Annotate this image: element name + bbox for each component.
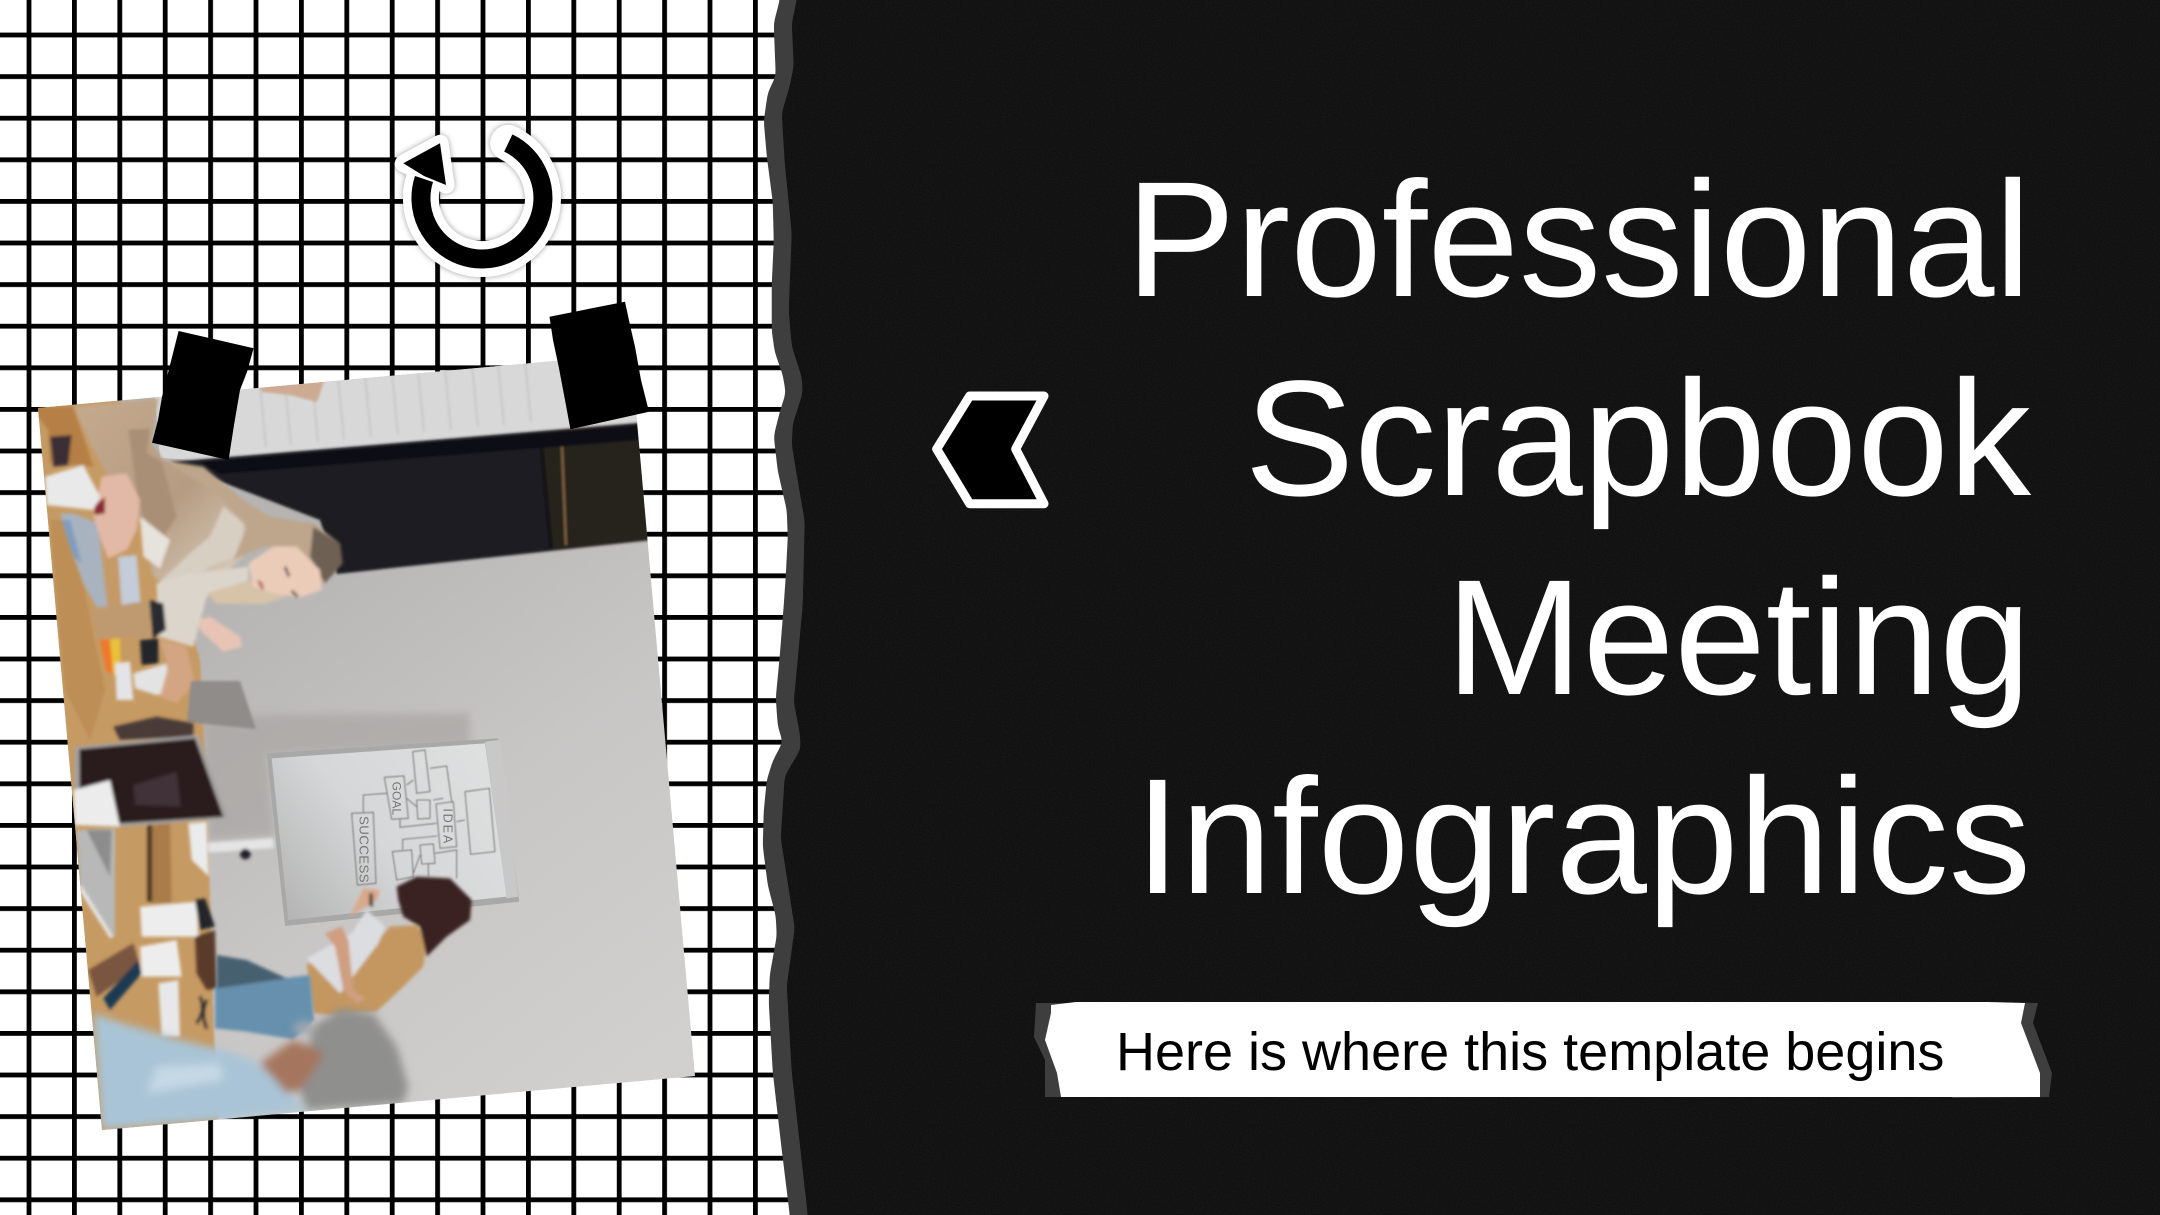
whiteboard: GOAL: [390, 782, 404, 815]
title: [1126, 147, 2032, 928]
subtitle tape: [1034, 1002, 2052, 1098]
icon: circular arrow: [403, 143, 543, 259]
seated man: [93, 1008, 408, 1130]
title: Meeting: [1446, 545, 2031, 729]
whiteboard diagram: [352, 750, 495, 885]
wooden table: [30, 400, 220, 1140]
whiteboard: IDEA: [440, 808, 454, 844]
photo: meeting with whiteboard: [30, 340, 710, 1140]
seated woman, desk items: [30, 398, 343, 703]
jeans: [215, 955, 314, 1039]
whiteboard: [267, 738, 519, 926]
panel: torn dark paper: [763, 0, 2160, 1215]
icon: chevron: [937, 396, 1044, 504]
laptops and cups: [73, 717, 274, 1037]
subtitle text: Here is where this template begins: [1116, 1022, 1944, 1082]
jeans and seated man: [93, 955, 408, 1130]
title: Infographics: [1135, 744, 2031, 928]
title: Professional: [1126, 147, 2031, 331]
whiteboard: SUCCESS: [356, 816, 371, 883]
tape: left: [152, 331, 254, 460]
brick wall: [155, 361, 637, 460]
wall shadow behind whiteboard: [203, 713, 470, 840]
silver laptop lid: [187, 681, 256, 729]
presenting woman: [307, 877, 472, 1015]
tape: right: [550, 302, 649, 429]
dark cabinet: [170, 423, 652, 574]
title: Scrapbook: [1245, 346, 2032, 530]
